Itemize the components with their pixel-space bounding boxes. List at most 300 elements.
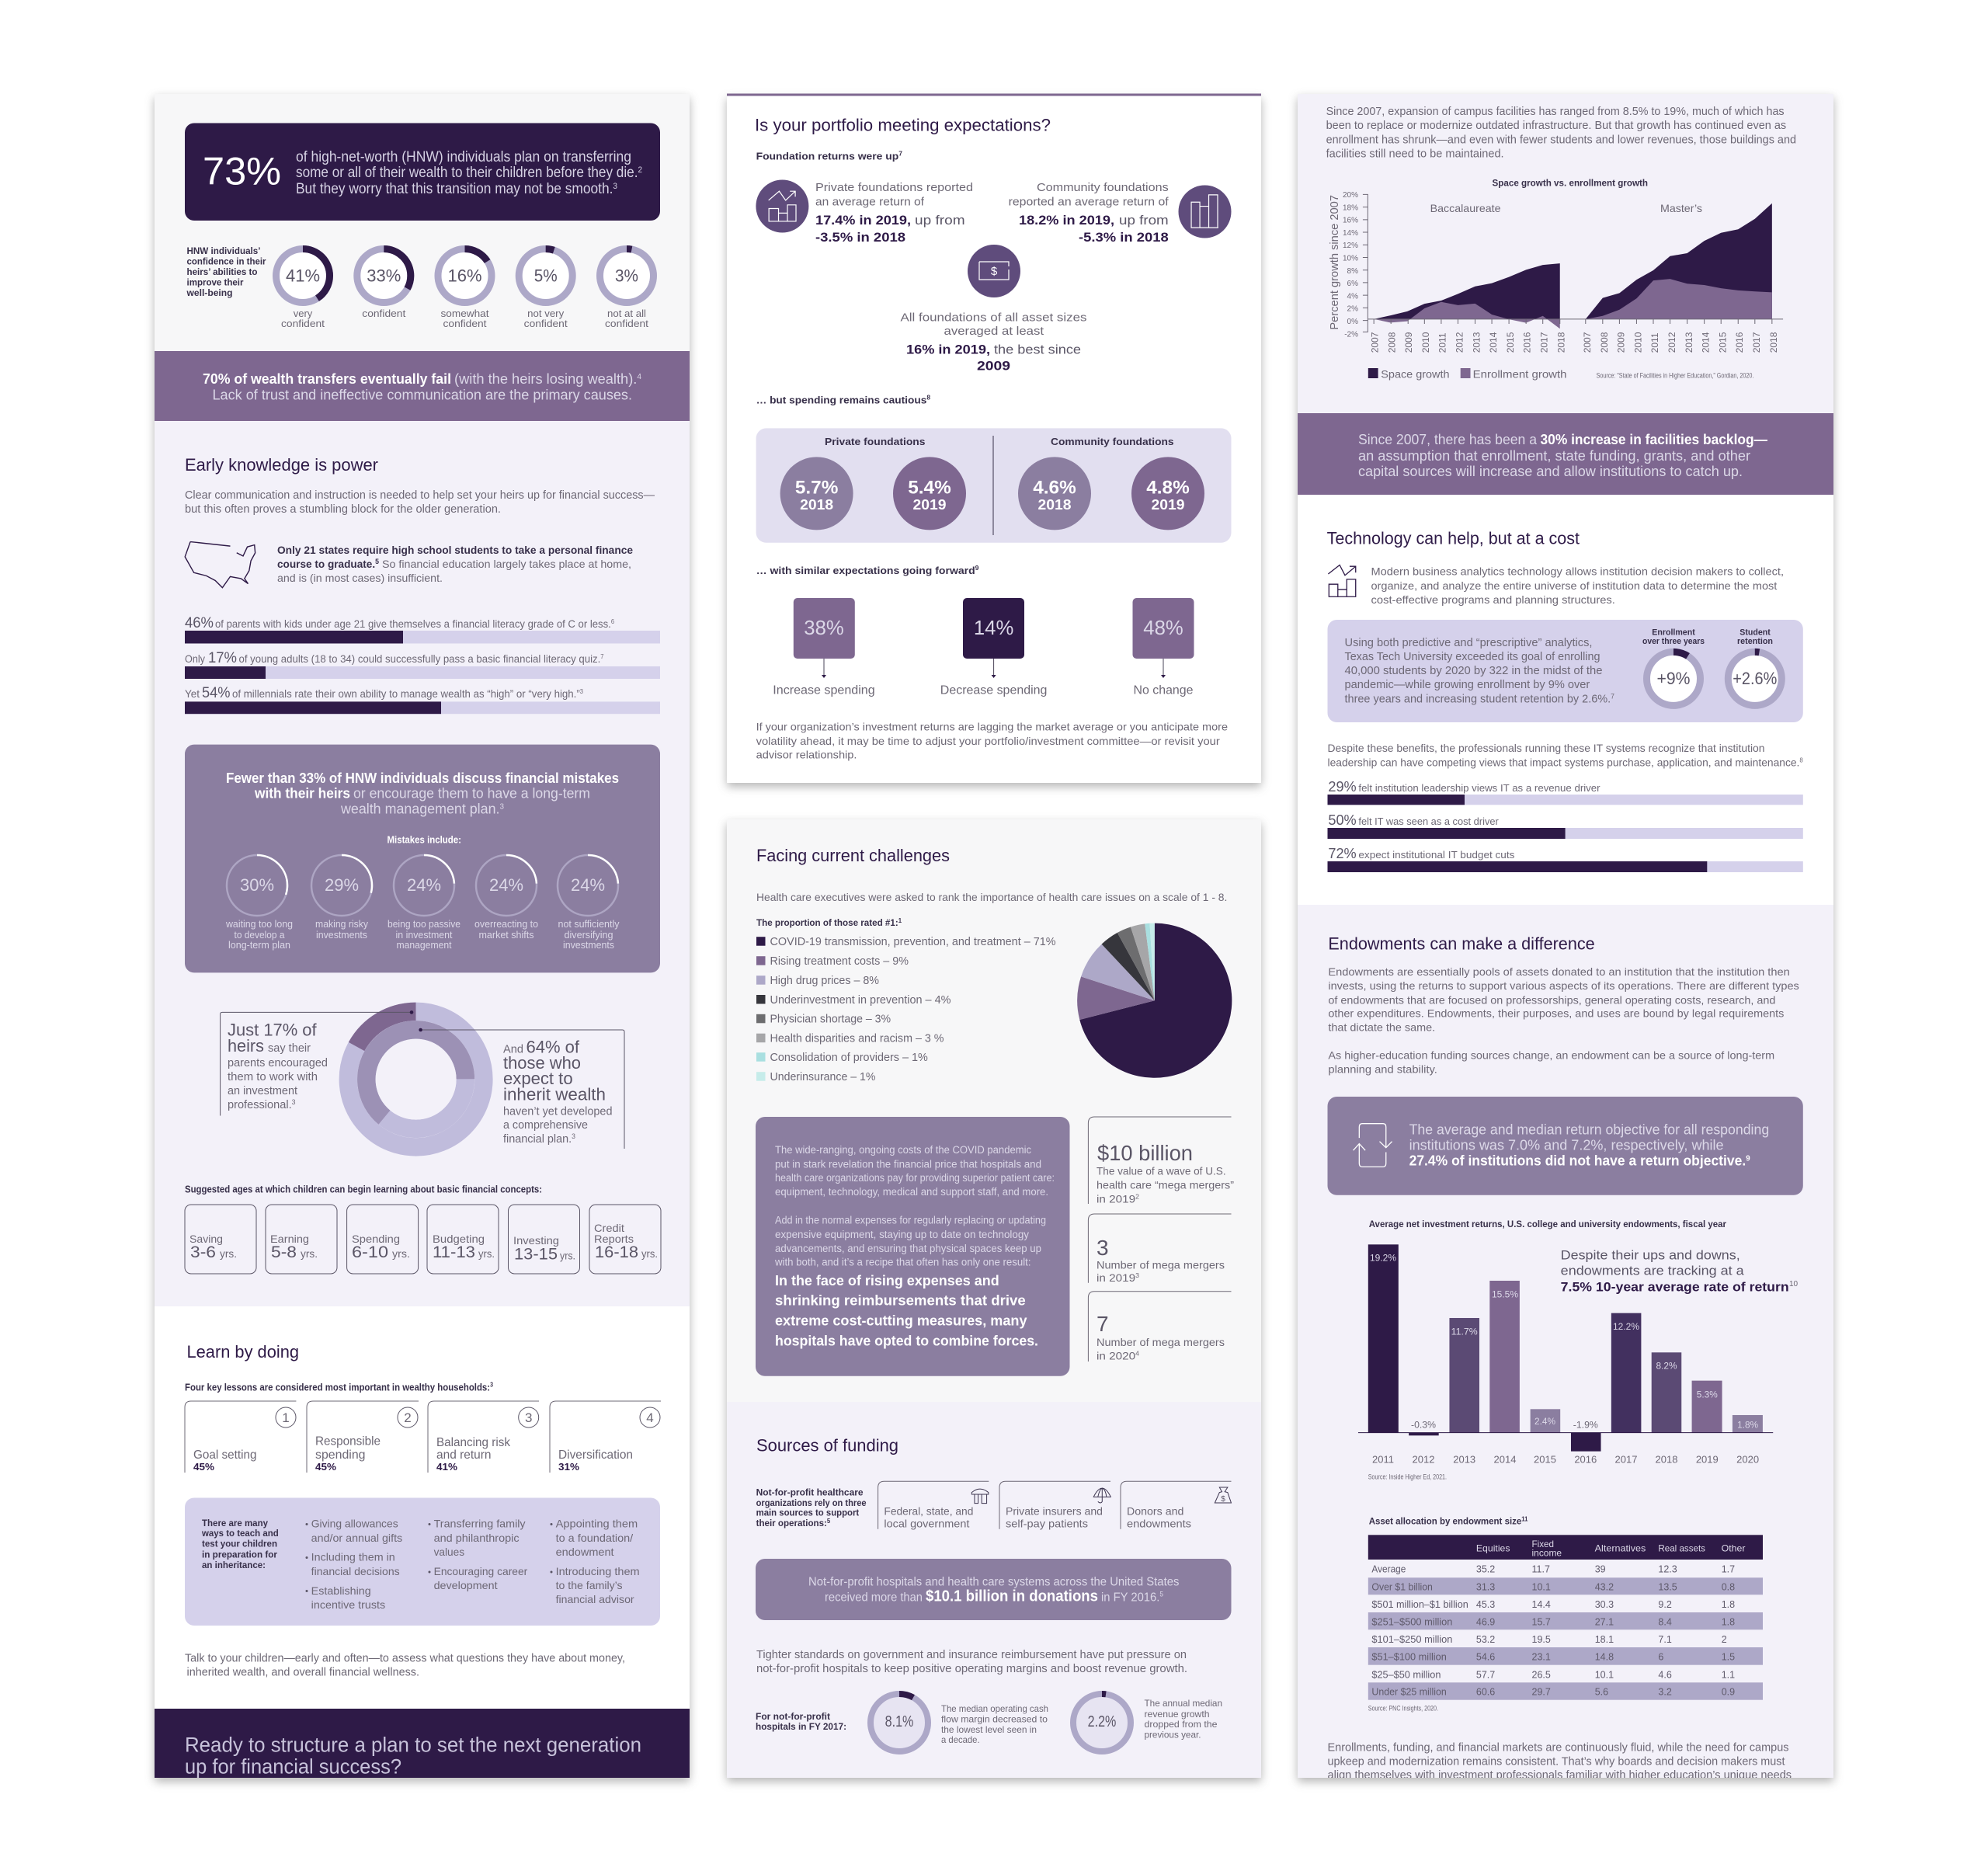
lesson cards: Responsible [315, 1435, 381, 1448]
text: community foundations return: 18.2% in 2019, [1019, 213, 1114, 228]
closing paragraph [756, 721, 1228, 760]
closing paragraph: advisor relationship. [756, 748, 857, 760]
confidence label: confidence in their [186, 256, 266, 267]
funding card: insurers: Private insurers and [1006, 1505, 1103, 1518]
footer call to action: Ready to structure a plan to set the next generation [185, 1734, 641, 1757]
callout: donations: received more than [825, 1591, 923, 1605]
icon: dollar bill [968, 245, 1020, 297]
panel: financial mistakes [185, 745, 660, 972]
pie chart legend: Rising treatment costs – 9% [770, 955, 909, 968]
table: asset allocation: $251–$500 million [1371, 1616, 1452, 1627]
callout: 17 percent: Just 17% of [228, 1021, 317, 1039]
bar chart: endowment returns: 11.7% [1451, 1326, 1478, 1337]
panel: ways to teach: incentive trusts [311, 1598, 385, 1611]
bar chart: IT views: 50% [1328, 812, 1357, 828]
bar chart: endowment returns: 2017 [1615, 1453, 1637, 1465]
age cards: Earning [270, 1233, 309, 1245]
spending expectation tiles: Decrease spending [940, 684, 1047, 697]
confidence donut charts: 16% [447, 266, 481, 286]
pie chart legend: High drug prices – 8% [770, 975, 879, 987]
confidence donut charts: somewhat [441, 308, 489, 319]
band: facilities backlog: 30% increase in facilities backlog— [1541, 432, 1767, 447]
callout: 17 percent: parents encouraged [228, 1056, 328, 1069]
bar chart: endowment returns: 2020 [1736, 1453, 1759, 1465]
bar chart: endowment returns: 8.2% [1656, 1361, 1677, 1372]
lesson cards: 31% [558, 1461, 579, 1473]
bar chart: IT views [1328, 779, 1803, 872]
paragraph: endowments [1328, 965, 1799, 1075]
panel: Texas Tech: 7 [1611, 692, 1614, 700]
table: asset allocation: 1.8 [1722, 1616, 1735, 1627]
panel: wealth transfer [155, 94, 690, 1779]
stat card: 7 mergers: Number of mega mergers [1097, 1336, 1225, 1348]
mistake rings: not sufficiently [558, 918, 620, 930]
callout: 17 percent: heirs [228, 1036, 264, 1055]
table: asset allocation: income [1531, 1547, 1562, 1558]
panel: ways to teach: Encouraging career [434, 1565, 528, 1577]
bar chart: endowment returns: Source: Inside Higher Ed, 2021. [1368, 1473, 1447, 1481]
bar chart: financial literacy: Only [185, 652, 205, 665]
text: all foundations: 16% in 2019, [906, 343, 990, 357]
age cards: yrs. [641, 1247, 658, 1260]
callout: 64 percent: those who [503, 1053, 581, 1073]
panel: financial mistakes: with their heirs [254, 786, 350, 802]
paragraph: campus expansion: facilities still need to be maintained. [1326, 148, 1504, 160]
subheading: foundation returns: 7 [898, 151, 903, 158]
donut: revenue growth: dropped from the [1145, 1719, 1218, 1730]
panel: Texas Tech: +9% [1657, 669, 1690, 688]
table: asset allocation: Average [1371, 1564, 1406, 1575]
stat card: 7 mergers [1088, 1292, 1232, 1362]
callout: return objective [1328, 1097, 1803, 1195]
stat card: 7 mergers: 4 [1135, 1351, 1140, 1358]
paragraph: tighter standards: Tighter standards on government and insurance reimbursement have put pressure on [756, 1648, 1187, 1661]
table: asset allocation: $51–$100 million [1371, 1652, 1447, 1663]
text: ten-year return: Despite their ups and downs, [1561, 1248, 1740, 1263]
pie chart legend: COVID-19 transmission, prevention, and treatment – 71% [770, 936, 1056, 948]
area chart: space vs enrollment growth: 10% [1343, 255, 1358, 263]
panel: ways to teach: financial decisions [311, 1565, 400, 1577]
mistake rings [225, 855, 620, 951]
panel: Texas Tech: Using both predictive and “prescriptive” analytics, [1345, 636, 1592, 649]
area chart: space vs enrollment growth: 12% [1343, 242, 1358, 250]
donut: revenue growth: 2.2% [1088, 1713, 1117, 1730]
bar chart: financial literacy: 7 [600, 653, 604, 660]
callout: 64 percent: expect to [503, 1069, 573, 1088]
paragraph: analytics [1371, 565, 1784, 606]
bar chart: endowment returns: Average net investment returns, U.S. college and university endowments, fiscal year [1369, 1219, 1726, 1229]
mistake rings: 24% [489, 875, 523, 895]
table: asset allocation: 10.1 [1595, 1669, 1614, 1680]
closing text: inherited wealth, and overall financial wellness. [186, 1665, 419, 1678]
area chart: space vs enrollment growth: 2015 [1505, 332, 1516, 353]
area chart: space vs enrollment growth: 2017 [1539, 332, 1550, 353]
callout: 17 percent [221, 1010, 413, 1115]
donut: operating margin [871, 1694, 1048, 1751]
callout: 64 percent: financial plan. [503, 1132, 575, 1146]
panel: higher education [1298, 105, 1833, 1782]
panel: ways to teach: Establishing [311, 1584, 371, 1597]
icon: US map [185, 542, 255, 588]
bar chart: IT views: felt IT was seen as a cost driver [1358, 816, 1499, 827]
mistake rings: to develop a [235, 929, 285, 941]
text: all foundations [901, 311, 1087, 373]
age cards: Budgeting [433, 1233, 485, 1245]
panel: ways to teach: and philanthropic [434, 1532, 520, 1544]
panel: ways to teach: Giving allowances [311, 1518, 398, 1530]
bar chart: endowment returns: 2018 [1656, 1453, 1677, 1465]
donut: operating margin: the lowest level seen in [941, 1724, 1037, 1735]
stat card: 3 mergers: 3 [1135, 1272, 1140, 1279]
table: asset allocation: 14.4 [1531, 1599, 1551, 1610]
age cards: Spending [352, 1233, 400, 1245]
donut: revenue growth: previous year. [1145, 1730, 1201, 1741]
donut: operating margin: a decade. [941, 1734, 980, 1745]
callout: 64 percent: haven’t yet developed [503, 1104, 612, 1118]
table: asset allocation: Under $25 million [1371, 1687, 1447, 1698]
confidence donut charts: not at all [607, 308, 646, 319]
donut: operating margin: The median operating cash [941, 1703, 1048, 1714]
table: asset allocation: $25–$50 million [1371, 1669, 1441, 1680]
table: asset allocation: 5.6 [1595, 1687, 1608, 1698]
bar chart: endowment returns: -0.3% [1411, 1420, 1436, 1431]
area chart: space vs enrollment growth: 18% [1343, 203, 1358, 212]
paragraph: analytics: cost-effective programs and planning structures. [1371, 593, 1615, 606]
closing paragraph: volatility ahead, it may be time to adjust your portfolio/investment committee—or revisit your [756, 735, 1220, 747]
paragraph: campus expansion: Since 2007, expansion of campus facilities has ranged from 8.5% to 19%, much of which has [1326, 105, 1785, 118]
callout: 73 percent: some or all of their wealth to their children before they die. [296, 165, 675, 181]
funding card: insurers: self-pay patients [1006, 1518, 1088, 1530]
panel: spending rates: 4.8% [1146, 477, 1190, 498]
table: asset allocation: 26.5 [1531, 1669, 1551, 1680]
confidence donut charts: confident [281, 318, 325, 329]
mistake rings: 29% [325, 875, 359, 895]
bar chart: financial literacy: 17% [208, 650, 237, 666]
icon: dollar bill: $ [991, 265, 998, 278]
funding card: donors: $ [1221, 1495, 1225, 1504]
table: asset allocation: Fixed [1531, 1539, 1554, 1549]
panel: financial mistakes: wealth management plan. [341, 801, 501, 816]
bar chart: IT views: 29% [1328, 779, 1357, 795]
stat card: 3 mergers: 3 [1097, 1236, 1109, 1260]
bar chart: endowment returns: 19.2% [1370, 1252, 1396, 1263]
lesson cards: 45% [315, 1461, 336, 1473]
callout: 64 percent: inherit wealth [503, 1085, 606, 1104]
text: 21 states: So financial education largely takes place at home, [382, 558, 631, 570]
funding card: government: Federal, state, and [884, 1505, 973, 1518]
paragraph: endowments: Endowments are essentially pools of assets donated to an institution that the institution then [1328, 965, 1790, 978]
age cards: Reports [594, 1233, 634, 1245]
donut: revenue growth [1073, 1694, 1222, 1751]
area chart: space vs enrollment growth: Enrollment growth [1473, 368, 1567, 381]
closing paragraph: higher education: Enrollments, funding, and financial markets are continuously fluid, while the need for campus [1328, 1741, 1789, 1754]
area chart: space vs enrollment growth: 2013 [1471, 332, 1482, 353]
area chart: space vs enrollment growth: 2008 [1386, 332, 1397, 353]
panel: ways to teach: development [434, 1579, 498, 1591]
confidence donut charts [276, 249, 654, 329]
panel: ways to teach: in preparation for [202, 1549, 277, 1560]
mistake rings: making risky [315, 918, 368, 930]
bar chart: IT views: expect institutional IT budget cuts [1358, 849, 1515, 861]
table: asset allocation: 8.4 [1658, 1616, 1672, 1627]
heading: sources of funding: Sources of funding [756, 1435, 898, 1455]
mistake rings: diversifying [564, 929, 613, 941]
area chart: space vs enrollment growth: Source: “State of Facilities in Higher Education,” Gordian, 2020. [1597, 372, 1753, 380]
panel: Texas Tech: three years and increasing student retention by 2.6%. [1345, 692, 1621, 705]
pie chart legend: Underinsurance – 1% [770, 1071, 876, 1083]
area chart: space vs enrollment growth: 2014 [1488, 332, 1499, 353]
bar chart: financial literacy [185, 615, 660, 714]
band: 70 percent: Lack of trust and ineffective communication are the primary causes. [213, 387, 632, 402]
panel: Texas Tech: pandemic—while growing enrollment by 9% over [1345, 678, 1590, 691]
spending expectation tiles: 14% [974, 616, 1013, 639]
funding card: government [878, 1481, 989, 1530]
bar chart: endowment returns: 1.8% [1737, 1420, 1758, 1431]
table: asset allocation: 11.7 [1531, 1564, 1550, 1575]
age cards: yrs. [478, 1247, 495, 1260]
text: community foundations return: reported an average return of [1009, 195, 1170, 208]
text: private foundations return: 17.4% in 2019, [815, 213, 911, 228]
text: all foundations: 2009 [977, 358, 1010, 373]
paragraph: endowments: that dictate the same. [1328, 1021, 1435, 1033]
area chart: space vs enrollment growth: 0% [1347, 318, 1358, 326]
text: private foundations return: an average return of [815, 195, 925, 208]
confidence label: improve their [186, 276, 244, 287]
text: three main sources: their operations: [756, 1518, 829, 1528]
spending expectation tiles: No change [1134, 684, 1193, 697]
pie chart legend [756, 936, 1056, 1083]
area chart: space vs enrollment growth: Baccalaureate [1430, 202, 1501, 214]
spending expectation tiles [773, 598, 1194, 697]
spending expectation tiles: 48% [1143, 616, 1183, 639]
area chart: space vs enrollment growth: 2008 [1599, 332, 1610, 353]
area chart: space vs enrollment growth: 4% [1347, 292, 1358, 301]
table: asset allocation: Over $1 billion [1371, 1581, 1433, 1592]
paragraph: campus expansion [1326, 105, 1796, 160]
bar chart: financial literacy: of millennials rate their own ability to manage wealth as “high” or “very high.” [232, 687, 599, 700]
panel: ways to teach: and/or annual gifts [311, 1532, 402, 1544]
panel: spending rates: 5.7% [795, 477, 838, 498]
band: facilities backlog [1298, 413, 1833, 495]
mistake rings: waiting too long [225, 918, 293, 930]
text: community foundations return [1009, 181, 1170, 245]
mistake rings: investments [316, 929, 367, 941]
confidence donut charts: confident [524, 318, 568, 329]
table: asset allocation: 15.7 [1531, 1616, 1551, 1627]
panel: ways to teach: to the family’s [556, 1579, 623, 1591]
confidence donut charts: 5% [534, 266, 558, 286]
panel: spending rates: 5.4% [908, 477, 951, 498]
stat card: 7 mergers: in 2020 [1097, 1350, 1132, 1362]
pie chart [1077, 923, 1232, 1078]
panel: covid costs: health care organizations pay for providing superior patient care: [775, 1172, 1055, 1184]
bar chart: endowment returns: -1.9% [1573, 1420, 1598, 1431]
table: asset allocation: 31.3 [1476, 1581, 1495, 1592]
funding card: donors: endowments [1127, 1518, 1191, 1530]
panel: financial mistakes: 3 [499, 802, 504, 811]
paragraph: endowments: of endowments that are focused on professorships, general operating costs, research, and [1328, 993, 1775, 1006]
text: ten-year return: endowments are tracking at a [1561, 1264, 1744, 1278]
area chart: space vs enrollment growth: 6% [1347, 280, 1358, 288]
panel: spending rates: 2019 [1151, 497, 1185, 513]
table: asset allocation: 7.1 [1658, 1634, 1672, 1645]
callout: 17 percent: professional. [228, 1098, 294, 1111]
area chart: space vs enrollment growth: 2007 [1582, 332, 1593, 353]
table: asset allocation: 45.3 [1476, 1599, 1495, 1610]
band: 70 percent: 4 [637, 373, 641, 381]
confidence label: well-being [186, 287, 233, 298]
label: fiscal year 2017: hospitals in FY 2017: [756, 1721, 846, 1732]
area chart: space vs enrollment growth: Master’s [1660, 202, 1702, 214]
bar chart: financial literacy: 3 [580, 688, 584, 695]
area chart: space vs enrollment growth: 2009 [1403, 332, 1414, 353]
table: asset allocation: 35.2 [1476, 1564, 1495, 1575]
table: asset allocation: 11 [1521, 1516, 1528, 1523]
text: community foundations return: Community foundations [1037, 181, 1169, 194]
stat card: 10 billion: in 2019 [1097, 1192, 1132, 1205]
panel: Texas Tech: over three years [1642, 637, 1705, 646]
funding card: government: local government [884, 1518, 970, 1530]
callout: donations: $10.1 billion in donations [926, 1588, 1098, 1605]
bar chart: financial literacy: of young adults (18 to 34) could successfully pass a basic financial literacy quiz. [239, 652, 623, 665]
table: asset allocation: Other [1722, 1543, 1746, 1554]
subheading: spending cautious: 8 [926, 395, 931, 402]
age cards: 6-10 [352, 1243, 388, 1261]
closing paragraph: higher education: align themselves with investment professionals familiar with higher education’s unique needs [1328, 1768, 1792, 1782]
panel: Texas Tech [1328, 620, 1803, 722]
table: asset allocation: Equities [1476, 1543, 1510, 1554]
table: asset allocation [1368, 1516, 1763, 1713]
table: asset allocation: 9.2 [1658, 1599, 1672, 1610]
band: facilities backlog: an assumption that enrollment, state funding, grants, and other [1358, 448, 1750, 464]
label: fiscal year 2017: For not-for-profit [756, 1711, 830, 1722]
table: asset allocation: 1.5 [1722, 1652, 1735, 1663]
lesson cards: Balancing risk [436, 1436, 511, 1449]
text: private foundations return: -3.5% in 2018 [815, 230, 905, 245]
lesson cards: and return [436, 1448, 491, 1462]
confidence donut charts: confident [362, 308, 406, 319]
table: asset allocation: 30.3 [1595, 1599, 1614, 1610]
spending expectation tiles: 38% [804, 616, 844, 639]
lesson cards: 2 [404, 1410, 412, 1425]
callout: 17 percent: say their [268, 1042, 311, 1055]
bar chart: endowment returns: 2012 [1413, 1453, 1434, 1465]
text: three main sources: main sources to support [756, 1508, 859, 1518]
table: asset allocation: 29.7 [1531, 1687, 1551, 1698]
age cards: 11-13 [433, 1243, 475, 1261]
panel: ways to teach: values [434, 1546, 464, 1558]
age cards: 3-6 [190, 1243, 216, 1261]
bar chart: financial literacy: 54% [202, 685, 231, 701]
stat card: 3 mergers [1088, 1214, 1232, 1284]
callout: 64 percent: a comprehensive [503, 1118, 588, 1132]
donut: revenue growth: revenue growth [1145, 1709, 1210, 1720]
band: 70 percent [155, 351, 690, 421]
area chart: space vs enrollment growth: 2012 [1454, 332, 1465, 353]
table: asset allocation: 39 [1595, 1564, 1606, 1575]
bar chart: endowment returns: 2016 [1574, 1453, 1597, 1465]
confidence donut charts: not very [527, 308, 565, 319]
mistake rings: 24% [571, 875, 605, 895]
closing text: Talk to your children—early and often—to assess what questions they have about money, [185, 1651, 625, 1664]
intro text [185, 489, 655, 516]
lesson cards: 45% [193, 1461, 214, 1473]
text: all foundations: All foundations of all asset sizes [901, 311, 1087, 325]
pie chart legend: Health disparities and racism – 3 % [770, 1033, 944, 1045]
table: asset allocation: 43.2 [1595, 1581, 1614, 1592]
lesson cards: 1 [282, 1410, 290, 1425]
text: private foundations return: Private foundations reported [815, 181, 973, 194]
lesson cards: spending [315, 1448, 365, 1462]
subheading: similar expectations: 9 [975, 565, 979, 572]
area chart: space vs enrollment growth: 2016 [1522, 332, 1533, 353]
table: asset allocation: 6 [1658, 1652, 1663, 1663]
panel: Texas Tech: retention [1737, 637, 1773, 646]
table: asset allocation: 2 [1722, 1634, 1727, 1645]
panel: ways to teach: Appointing them [556, 1518, 638, 1530]
callout: donations: 5 [1159, 1591, 1163, 1598]
heading: endowments: Endowments can make a difference [1328, 934, 1595, 953]
paragraph: competing views: Despite these benefits, the professionals running these IT systems recognize that institution [1328, 742, 1764, 754]
area chart: space vs enrollment growth: 20% [1343, 191, 1358, 200]
paragraph: tighter standards: not-for-profit hospitals to keep positive operating margins and boost revenue growth. [756, 1662, 1187, 1675]
closing paragraph: If your organization’s investment returns are lagging the market average or you anticipate more [756, 721, 1228, 733]
age cards: 5-8 [271, 1243, 297, 1261]
area chart: space vs enrollment growth: -2% [1344, 330, 1358, 339]
area chart: space vs enrollment growth: 2018 [1555, 332, 1566, 353]
funding card: donors: Donors and [1127, 1505, 1183, 1518]
heading: suggested ages: Suggested ages at which children can begin learning about basic financial concepts: [185, 1184, 542, 1195]
mistake rings: long-term plan [228, 939, 290, 951]
text: private foundations return [815, 181, 973, 245]
intro text: executives: Health care executives were asked to rank the importance of health care issues on a scale of 1 - 8. [756, 891, 1227, 903]
subheading: rated number one: The proportion of those rated #1: [756, 917, 903, 928]
stat card: 3 mergers: in 2019 [1097, 1271, 1132, 1284]
area chart: space vs enrollment growth: 2018 [1768, 332, 1779, 353]
subheading: foundation returns: Foundation returns were up [756, 151, 890, 162]
callout: 17 percent: an investment [228, 1084, 298, 1097]
callout: return objective: The average and median return objective for all responding [1409, 1122, 1769, 1137]
subheading: four key lessons: 3 [490, 1382, 493, 1389]
panel: Texas Tech: +2.6% [1733, 669, 1777, 688]
pie chart legend: Underinvestment in prevention – 4% [770, 994, 951, 1007]
table: asset allocation: 0.8 [1722, 1581, 1735, 1592]
lesson cards: 41% [436, 1461, 457, 1473]
band: facilities backlog: Since 2007, there has been a [1358, 432, 1538, 447]
text: community foundations return: up from [1119, 213, 1169, 228]
table: asset allocation: Real assets [1658, 1543, 1705, 1554]
panel: ways to teach: There are many [202, 1518, 268, 1528]
panel: spending rates: 2019 [913, 497, 946, 513]
paragraph: analytics: Modern business analytics technology allows institution decision makers to collect, [1371, 565, 1784, 578]
area chart: space vs enrollment growth: 2011 [1649, 332, 1660, 353]
bar chart: IT views: felt institution leadership views IT as a revenue driver [1358, 782, 1600, 794]
table: asset allocation: $101–$250 million [1371, 1634, 1452, 1645]
text: ten-year return: 7.5% 10-year average rate of return [1561, 1279, 1789, 1294]
paragraph: endowments: As higher-education funding sources change, an endowment can be a source of long-term [1328, 1049, 1774, 1061]
panel: covid costs: hospitals have opted to combine forces. [775, 1333, 1038, 1348]
confidence label: heirs’ abilities to [186, 266, 258, 277]
panel: Texas Tech: Enrollment [1652, 628, 1695, 638]
panel: covid costs [756, 1117, 1070, 1376]
paragraph: endowments: other expenditures. Endowments, their purposes, and uses are bound by legal requirements [1328, 1007, 1784, 1019]
text: three main sources: Not-for-profit healthcare [756, 1487, 864, 1498]
paragraph: endowments: planning and stability. [1328, 1062, 1437, 1075]
table: asset allocation: 1.8 [1722, 1599, 1735, 1610]
callout: 73 percent: But they worry that this transition may not be smooth. [296, 181, 644, 197]
panel: covid costs: expensive equipment, staying up to date on technology [775, 1229, 1029, 1240]
panel: health care challenges and funding [727, 819, 1261, 1778]
